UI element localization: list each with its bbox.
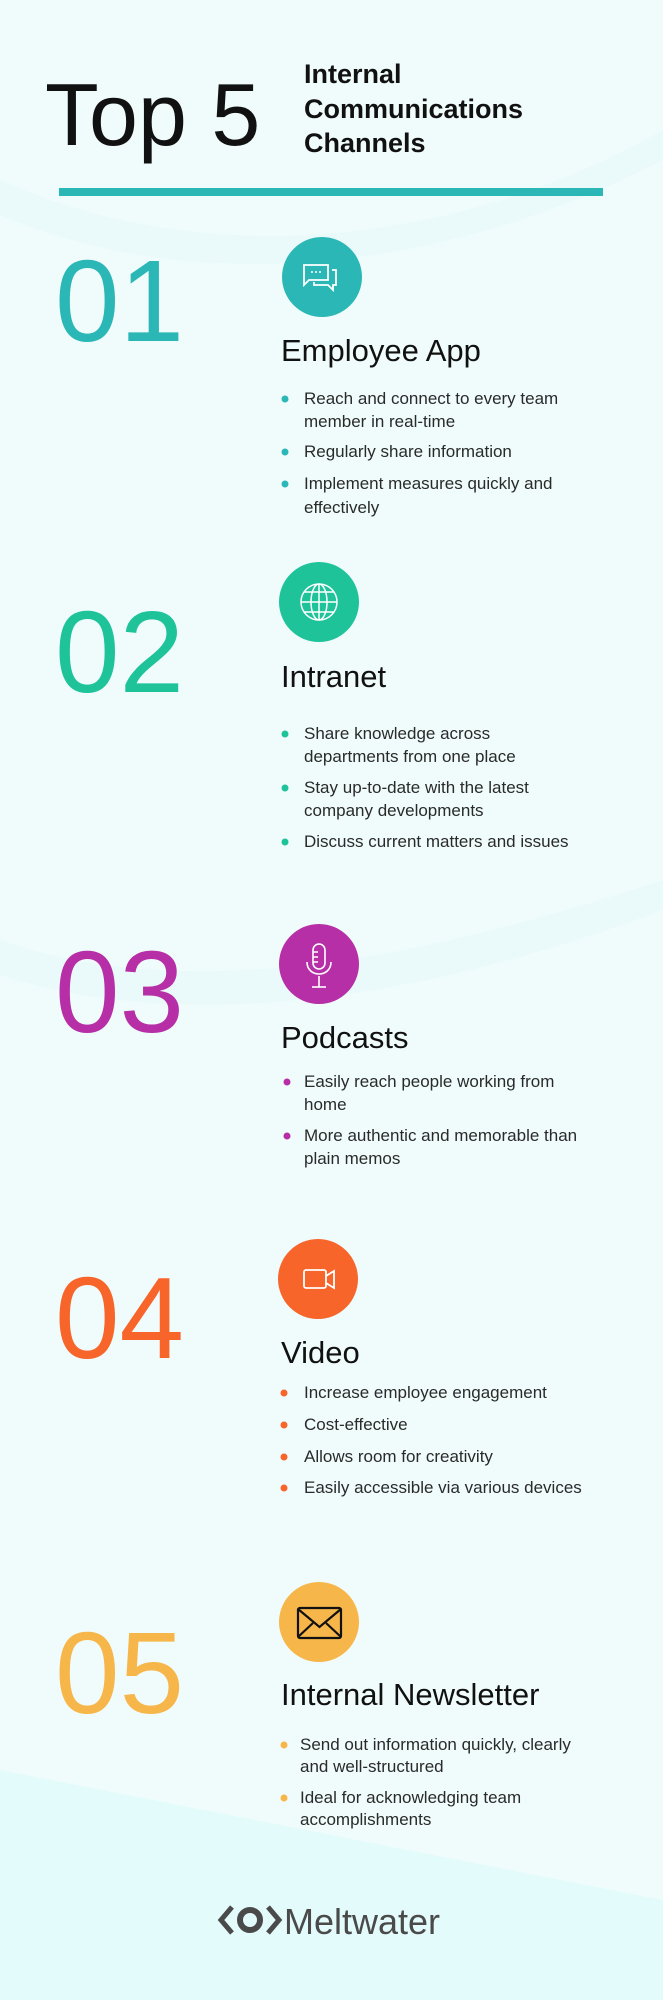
- heading: Internal Newsletter: [281, 1677, 539, 1712]
- number 02: 02: [55, 587, 184, 717]
- bullets: effectively: [304, 498, 380, 517]
- number 04: 04: [55, 1253, 184, 1383]
- panel: 03 podcasts: [55, 924, 577, 1168]
- panel: 04 video: [55, 1239, 582, 1497]
- title: Internal: [304, 59, 402, 89]
- panel: 01 employee app: [55, 236, 558, 517]
- bullets: [282, 389, 558, 517]
- bullets: Increase employee engagement: [304, 1383, 547, 1402]
- bullets: Regularly share information: [304, 442, 512, 461]
- bullets: Discuss current matters and issues: [304, 832, 569, 851]
- bullets: Reach and connect to every team: [304, 389, 558, 408]
- bullets: [280, 1383, 582, 1497]
- number 05: 05: [55, 1608, 184, 1738]
- heading: Podcasts: [281, 1020, 409, 1055]
- title: Communications: [304, 94, 523, 124]
- bullets: home: [304, 1095, 347, 1114]
- bullets: Ideal for acknowledging team: [300, 1788, 521, 1807]
- bullets: Stay up-to-date with the latest: [304, 778, 529, 797]
- icon: envelope: [279, 1582, 359, 1662]
- heading: Employee App: [281, 333, 481, 368]
- icon: globe: [279, 562, 359, 642]
- bullets: member in real-time: [304, 412, 455, 431]
- icon: chat bubbles: [282, 237, 362, 317]
- title: [45, 59, 523, 164]
- bullets: Send out information quickly, clearly: [300, 1735, 571, 1754]
- bullets: Cost-effective: [304, 1415, 408, 1434]
- panel: 02 intranet: [55, 562, 569, 851]
- bullets: Share knowledge across: [304, 724, 490, 743]
- title: Top 5: [45, 65, 260, 164]
- icon: video camera: [278, 1239, 358, 1319]
- bullets: Allows room for creativity: [304, 1447, 493, 1466]
- bullets: accomplishments: [300, 1810, 431, 1829]
- title: Channels: [304, 128, 426, 158]
- bullets: More authentic and memorable than: [304, 1126, 577, 1145]
- bullets: company developments: [304, 801, 484, 820]
- bullets: Easily reach people working from: [304, 1072, 554, 1091]
- bullets: Easily accessible via various devices: [304, 1478, 582, 1497]
- bullets: Implement measures quickly and: [304, 474, 553, 493]
- icon: microphone: [279, 924, 359, 1004]
- bullets: [282, 724, 569, 851]
- number 03: 03: [55, 927, 184, 1057]
- number 01: 01: [55, 236, 184, 366]
- bullets: plain memos: [304, 1149, 400, 1168]
- bullets: departments from one place: [304, 747, 516, 766]
- logo: Meltwater: Meltwater: [284, 1901, 440, 1942]
- heading: Video: [281, 1335, 360, 1370]
- bullets: [280, 1735, 571, 1829]
- bullets: [284, 1072, 577, 1168]
- panel: 05 internal newsletter: [55, 1582, 571, 1829]
- bullets: and well-structured: [300, 1757, 444, 1776]
- heading: Intranet: [281, 659, 387, 694]
